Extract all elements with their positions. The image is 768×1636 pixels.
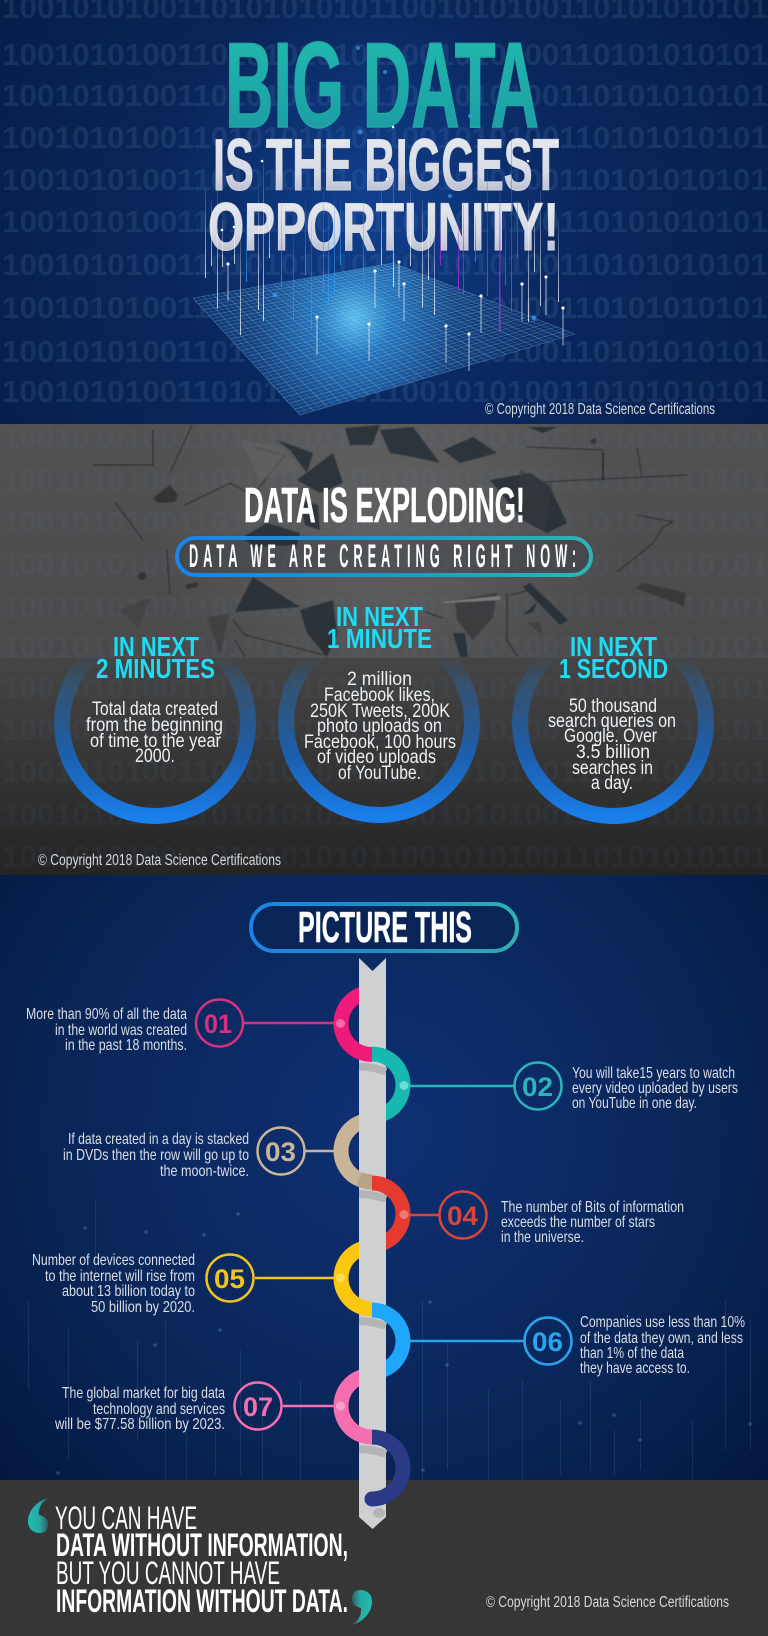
panel: data is exploding background: 10010101001101010101011001010100110101010101 bbox=[2, 505, 768, 540]
quote text: INFORMATION WITHOUT DATA. bbox=[56, 1583, 348, 1619]
panel: hero background: 10010101001101010101011001010100110101010101 bbox=[2, 162, 768, 197]
item 06: than 1% of the data bbox=[580, 1345, 684, 1362]
item 04 bbox=[400, 1192, 684, 1246]
panel: in next 2 minutes bbox=[62, 630, 248, 816]
panel: hero background bbox=[0, 0, 768, 424]
panel: closing quote background bbox=[0, 1480, 768, 1636]
panel: in next 1 second: a day. bbox=[591, 773, 633, 794]
item 06: they have access to. bbox=[580, 1360, 690, 1377]
panel: in next 2 minutes: 2000. bbox=[135, 746, 175, 767]
panel: in next 1 minute: of YouTube. bbox=[338, 763, 421, 784]
panel: hero background: 10010101001101010101011001010100110101010101 bbox=[2, 290, 768, 325]
panel: data is exploding background: 10010101001101010101011001010100110101010101 bbox=[2, 589, 768, 624]
illustration: data grid plane bbox=[193, 263, 575, 415]
panel: in next 1 minute: 2 million bbox=[347, 669, 412, 690]
item 03 bbox=[63, 1128, 340, 1180]
panel: in next 1 second: searches in bbox=[572, 758, 653, 779]
panel: in next 1 minute: 250K Tweets, 200K bbox=[310, 701, 450, 722]
item 02: on YouTube in one day. bbox=[572, 1095, 697, 1112]
panel: in next 1 second: 50 thousand bbox=[569, 696, 657, 717]
item 04: in the universe. bbox=[501, 1229, 584, 1246]
panel: in next 1 minute: Facebook likes, bbox=[324, 685, 435, 706]
illustration: shattered wall fragments bbox=[93, 425, 687, 657]
panel: in next 1 second: IN NEXT bbox=[570, 631, 657, 662]
timeline: ribbon shadows on spine bbox=[359, 1066, 386, 1518]
panel: hero background: 10010101001101010101011001010100110101010101 bbox=[2, 204, 768, 239]
icon: opening quote mark bbox=[28, 1498, 48, 1533]
panel: hero background: 10010101001101010101011001010100110101010101 bbox=[2, 334, 768, 369]
panel: hero background: 10010101001101010101011001010100110101010101 bbox=[2, 78, 768, 113]
quote text bbox=[55, 1500, 348, 1619]
panel: data is exploding background: 10010101001101010101011001010100110101010101 bbox=[2, 839, 768, 874]
item 07: will be $77.58 billion by 2023. bbox=[54, 1416, 225, 1433]
panel: in next 1 minute: 1 MINUTE bbox=[327, 623, 432, 654]
item 01: in the past 18 months. bbox=[65, 1037, 187, 1054]
panel: in next 1 minute bbox=[286, 601, 472, 815]
heading pill: picture this bbox=[251, 903, 517, 952]
panel: in next 2 minutes: of time to the year bbox=[90, 731, 222, 752]
item 05: to the internet will rise from bbox=[45, 1268, 195, 1285]
item 05: about 13 billion today to bbox=[62, 1283, 195, 1300]
item 01: More than 90% of all the data bbox=[26, 1006, 187, 1023]
quote text: DATA WITHOUT INFORMATION, bbox=[56, 1527, 348, 1563]
panel: in next 1 second: 3.5 billion bbox=[576, 742, 650, 763]
panel: hero background: 10010101001101010101011001010100110101010101 bbox=[2, 37, 768, 72]
item 03: the moon-twice. bbox=[160, 1163, 249, 1180]
item 07: The global market for big data bbox=[62, 1385, 225, 1402]
copyright: exploding section: © Copyright 2018 Data Science Certifications bbox=[38, 852, 281, 869]
subheading pill: data we are creating right now: DATA WE ARE CREATING RIGHT NOW: bbox=[189, 539, 576, 575]
item 07 bbox=[54, 1382, 345, 1433]
panel: in next 1 minute: photo uploads on bbox=[317, 716, 442, 737]
panel: data is exploding background bbox=[0, 420, 768, 875]
panel: in next 1 second: search queries on bbox=[548, 711, 676, 732]
panel: hero background: 10010101001101010101011001010100110101010101 bbox=[2, 120, 768, 155]
panel: in next 1 minute: of video uploads bbox=[317, 747, 436, 768]
item 01: 01 bbox=[204, 1009, 232, 1039]
item 05: 05 bbox=[214, 1264, 245, 1294]
panel: in next 1 second: 1 SECOND bbox=[559, 653, 668, 684]
panel: in next 1 second bbox=[520, 630, 706, 816]
panel: in next 1 minute: IN NEXT bbox=[336, 601, 423, 632]
item 01 bbox=[26, 1000, 345, 1054]
timeline: central spine bbox=[359, 958, 386, 1529]
panel: data is exploding background: 10010101001101010101011001010100110101010101 bbox=[2, 462, 768, 497]
panel: in next 1 second: Google. Over bbox=[564, 726, 658, 747]
item 04: 04 bbox=[447, 1201, 478, 1231]
heading pill: picture this: PICTURE THIS bbox=[298, 903, 472, 952]
quote text: YOU CAN HAVE bbox=[55, 1500, 197, 1536]
timeline: ribbon segments in front of spine bbox=[341, 1024, 403, 1506]
illustration: rising data light streaks bbox=[205, 46, 565, 371]
item 01: in the world was created bbox=[55, 1022, 187, 1039]
panel: data is exploding background: 10010101001101010101011001010100110101010101 bbox=[2, 420, 768, 455]
icon: closing quote mark bbox=[352, 1590, 372, 1625]
panel: hero background: 10010101001101010101011001010100110101010101 bbox=[2, 374, 768, 409]
panel: data is exploding background: 10010101001101010101011001010100110101010101 bbox=[2, 712, 768, 747]
item 04: The number of Bits of information bbox=[501, 1199, 684, 1216]
panel: data is exploding background: 10010101001101010101011001010100110101010101 bbox=[2, 629, 768, 664]
heading: data is exploding: DATA IS EXPLODING! bbox=[244, 479, 525, 533]
item 05: Number of devices connected bbox=[32, 1252, 195, 1269]
panel: in next 2 minutes: IN NEXT bbox=[113, 631, 199, 662]
item 03: in DVDs then the row will go up to bbox=[63, 1147, 249, 1164]
title: opportunity: OPPORTUNITY! bbox=[208, 189, 559, 265]
panel: picture this background bbox=[0, 875, 768, 1480]
item 05: 50 billion by 2020. bbox=[91, 1299, 195, 1316]
item 02: 02 bbox=[522, 1072, 553, 1102]
panel: data is exploding background: 10010101001101010101011001010100110101010101 bbox=[2, 547, 768, 582]
panel: in next 1 minute: Facebook, 100 hours bbox=[304, 732, 456, 753]
item 05 bbox=[32, 1252, 345, 1316]
panel: data is exploding background: 10010101001101010101011001010100110101010101 bbox=[2, 797, 768, 832]
panel: in next 2 minutes: Total data created bbox=[92, 699, 218, 720]
quote text: BUT YOU CANNOT HAVE bbox=[56, 1555, 280, 1591]
item 03: If data created in a day is stacked bbox=[68, 1131, 249, 1148]
item 04: exceeds the number of stars bbox=[501, 1214, 655, 1231]
panel: in next 2 minutes: from the beginning bbox=[86, 715, 223, 736]
panel: data is exploding background: 10010101001101010101011001010100110101010101 bbox=[2, 670, 768, 705]
panel: in next 2 minutes: 2 MINUTES bbox=[96, 653, 215, 684]
item 03: 03 bbox=[265, 1137, 296, 1167]
timeline: ribbon segments behind spine bbox=[341, 992, 403, 1406]
item 02 bbox=[400, 1062, 738, 1112]
panel: data is exploding background: 10010101001101010101011001010100110101010101 bbox=[2, 754, 768, 789]
panel: hero background: 10010101001101010101011001010100110101010101 bbox=[2, 247, 768, 282]
item 06 bbox=[404, 1314, 745, 1377]
item 07: 07 bbox=[243, 1392, 273, 1422]
item 07: technology and services bbox=[93, 1401, 225, 1418]
item 06: 06 bbox=[532, 1327, 563, 1357]
